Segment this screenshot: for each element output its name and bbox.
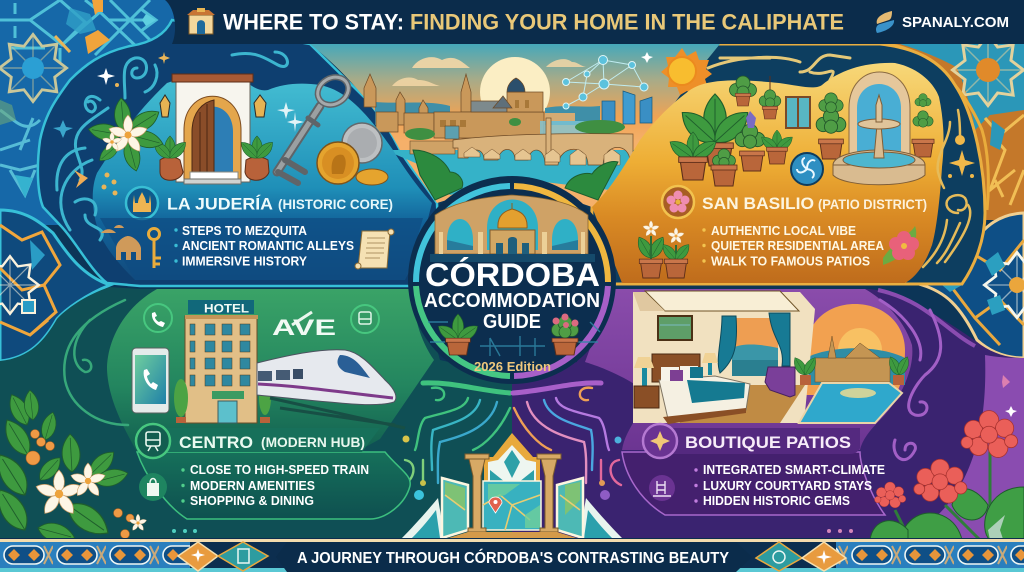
panel: lower-right tile corner <box>922 213 1024 358</box>
icon: cypress trees <box>174 379 271 417</box>
decorative sparkles right <box>1002 375 1017 417</box>
river <box>385 150 640 195</box>
decorative gold orbs and star <box>948 135 975 178</box>
panel: La Judería inner panel <box>93 75 432 280</box>
icon: potted plant left <box>435 314 481 355</box>
panel: Centro list: MODERN AMENITIES <box>190 478 315 493</box>
decorative swirls: purple surround <box>880 300 941 460</box>
panel: San Basilio dark surround <box>590 44 985 284</box>
decorative swirls: blue panel <box>57 52 287 240</box>
panel: San Basilio heading <box>662 186 927 218</box>
icon: house <box>187 8 215 34</box>
panel: Boutique Patios heading: BOUTIQUE PATIOS <box>685 433 851 452</box>
central heading: GUIDE <box>483 311 541 333</box>
illustration: map and columns <box>442 433 583 540</box>
wall <box>633 292 815 423</box>
decorative ring quadrants <box>416 186 608 376</box>
panel: San Basilio inner panel <box>592 63 944 283</box>
decorative swirls: green surround <box>64 300 128 425</box>
sunset view circle <box>805 304 905 395</box>
illustration: hotel building <box>174 300 271 423</box>
footer ribbon: A JOURNEY THROUGH CÓRDOBA'S CONTRASTING BEAUTY <box>297 548 729 567</box>
title <box>223 10 844 34</box>
icon: potted plants group <box>666 93 934 186</box>
panel: La Judería heading <box>126 187 393 219</box>
panel: footer strip <box>0 538 1024 572</box>
panel: Centro inner panel <box>107 289 434 519</box>
panel: San Basilio list: AUTHENTIC LOCAL VIBE <box>711 223 856 238</box>
panel: La Judería list: STEPS TO MEZQUITA <box>182 223 308 238</box>
bed <box>652 354 750 424</box>
panel: Boutique Patios inner panel <box>585 289 912 515</box>
decorative gold flourish <box>708 55 850 80</box>
icon: hanging plants <box>730 76 781 119</box>
swimming pool <box>799 383 902 423</box>
panel: Boutique Patios list <box>694 462 885 508</box>
tile row right <box>836 542 1024 568</box>
bank foliage <box>413 150 463 200</box>
panel: San Basilio heading: SAN BASILIO <box>702 194 814 213</box>
panel: La Judería heading: LA JUDERÍA <box>167 194 273 214</box>
icon: terracotta pots <box>151 136 276 180</box>
network digital overlay <box>566 60 644 106</box>
icon: pool ladder badge <box>649 475 675 501</box>
icon: sun <box>661 48 712 96</box>
decorative central wave lines: left <box>403 383 510 485</box>
tile peak behind columns <box>484 433 540 485</box>
icon: old key <box>277 72 353 183</box>
decorative central wave lines: right <box>513 383 621 485</box>
icon: lanterns <box>160 95 266 117</box>
panel: top-right Moorish tile corner <box>870 34 1024 220</box>
modern towers <box>602 91 652 125</box>
decorative three-dot rows <box>172 529 853 533</box>
illustration: Mezquita arches and dome <box>430 195 595 258</box>
panel: header bar <box>165 0 1024 44</box>
building group <box>364 74 544 139</box>
panel: Boutique Patios list: HIDDEN HISTORIC GEMS <box>703 493 850 508</box>
floor <box>668 385 805 423</box>
icon: white flowers in pots <box>634 221 692 278</box>
icon: sparkle badge <box>643 424 677 458</box>
logo: spanaly <box>876 11 1009 33</box>
panel: top-left Moorish tile corner <box>0 0 180 225</box>
icon: window <box>786 97 810 128</box>
ceiling <box>645 291 799 311</box>
panel: San Basilio heading: (PATIO DISTRICT) <box>818 197 927 212</box>
illustration: orange blossom branch <box>0 389 147 546</box>
title: WHERE TO STAY: <box>223 10 404 34</box>
Roman bridge <box>453 118 633 165</box>
tile row left <box>0 542 190 568</box>
icon: patio fountain <box>833 72 925 185</box>
panel: Centro heading: CENTRO <box>179 433 253 452</box>
logo: AVE: AVE <box>272 315 336 340</box>
icon: parchment scroll <box>355 229 394 269</box>
edition label: 2026 Edition <box>474 359 551 374</box>
icon: central hub medallion <box>408 176 616 384</box>
central heading: ACCOMMODATION <box>424 290 600 312</box>
balcony plants <box>791 355 912 385</box>
decorative swirls: orange surround <box>923 110 970 267</box>
icon: phone badge <box>144 304 172 332</box>
open map <box>442 478 583 538</box>
panel: Boutique Patios list: LUXURY COURTYARD STAYS <box>703 478 872 493</box>
icon: mosque badge <box>126 187 158 219</box>
icon: pink flower badge <box>662 186 694 218</box>
illustration: hotel building: HOTEL <box>204 302 249 316</box>
panel: San Basilio list: QUIETER RESIDENTIAL AREA <box>711 238 885 253</box>
panel: La Judería dark surround <box>38 20 440 286</box>
panel: Boutique Patios list: INTEGRATED SMART-CLIMATE <box>703 462 885 477</box>
central heading: CÓRDOBA <box>425 257 600 293</box>
panel: Boutique Patios heading <box>643 424 860 458</box>
panel: Centro list <box>181 462 369 508</box>
decorative corner tile triangles <box>400 498 624 540</box>
panel: lower-left tile corner <box>0 210 110 361</box>
icon: coins <box>317 123 388 185</box>
purple armchair <box>765 367 795 397</box>
illustration: skyline landscape <box>310 44 720 207</box>
illustration: Moorish doorway <box>151 74 276 184</box>
trees <box>405 118 625 140</box>
distant Mezquita <box>815 336 890 382</box>
decorative sparkles: blue panel <box>97 68 304 132</box>
icon: mini mosque and gold key <box>101 225 161 268</box>
decorative gold sparkle and confetti <box>74 52 170 196</box>
picture on wall <box>658 316 692 340</box>
icon: setting sun <box>480 57 550 127</box>
panel: La Judería list: ANCIENT ROMANTIC ALLEYS <box>182 238 354 253</box>
illustration: geraniums <box>870 411 1024 545</box>
title: FINDING YOUR HOME IN THE CALIPHATE <box>410 10 844 34</box>
clouds <box>412 57 470 68</box>
footer ribbon <box>276 542 752 572</box>
decorative list band <box>100 218 423 280</box>
bedside lamps <box>634 353 718 408</box>
decorative node dots <box>402 436 622 500</box>
columns <box>465 454 561 532</box>
panel: La Judería list: IMMERSIVE HISTORY <box>182 254 307 268</box>
logo: spanaly: SPANALY.COM <box>902 14 1009 31</box>
panel: Centro heading <box>136 424 380 458</box>
curtains <box>718 313 790 373</box>
icon: train badge <box>351 305 379 333</box>
panel: San Basilio list <box>702 223 885 268</box>
decorative circuit traces <box>428 322 600 356</box>
tan riverside wall <box>410 141 455 154</box>
diamond icons left <box>178 542 268 571</box>
icon: smartphone <box>132 348 169 413</box>
icon: train heading badge <box>136 424 170 458</box>
icon: orange blossom <box>87 97 165 173</box>
panel: San Basilio list: WALK TO FAMOUS PATIOS <box>711 254 870 268</box>
panel: La Judería heading: (HISTORIC CORE) <box>278 197 393 212</box>
illustration: AVE high-speed train <box>257 350 405 428</box>
logo: AVE <box>272 312 336 340</box>
panel: Centro list: CLOSE TO HIGH-SPEED TRAIN <box>190 462 369 477</box>
illustration: bedroom interior <box>633 291 912 424</box>
diamond icons right <box>756 542 846 571</box>
panel: Centro heading: (MODERN HUB) <box>261 435 365 450</box>
icon: red hibiscus <box>883 226 919 265</box>
panel: La Judería list <box>100 218 423 280</box>
central heading <box>424 257 600 333</box>
icon: fan badge <box>791 153 823 185</box>
icon: potted plant right <box>552 314 578 355</box>
panel: Boutique Patios dark surround <box>512 289 1024 540</box>
panel: Centro dark surround <box>0 287 512 540</box>
icon: shopping bag <box>139 473 167 501</box>
balcony view <box>732 318 778 376</box>
hills <box>375 102 600 125</box>
panel: Centro list: SHOPPING & DINING <box>190 493 314 508</box>
